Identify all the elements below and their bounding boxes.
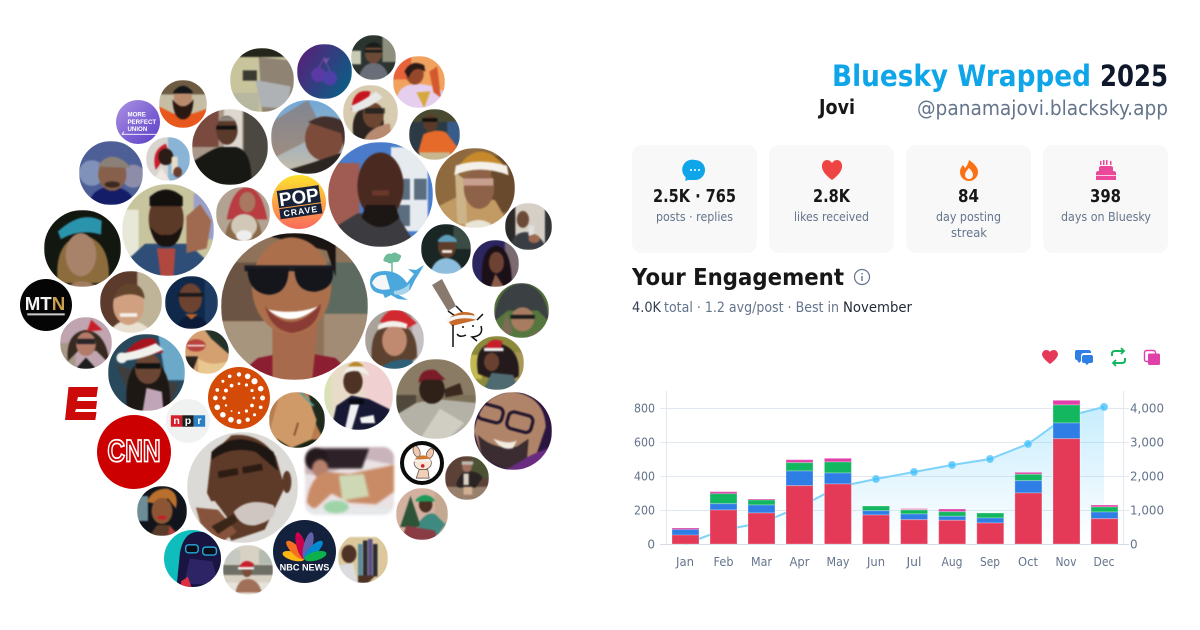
avatar: man with cat (216, 187, 270, 241)
icon: speech bubble (682, 160, 705, 181)
month labels: Oct (1018, 555, 1038, 569)
avatar: older man smiling (100, 271, 162, 333)
right axis labels: 3,000 (1130, 436, 1164, 450)
display name: Jovi (817, 95, 855, 119)
avatar: More Perfect Union logo: PERFECT (127, 119, 156, 126)
avatar: Pop Crave logo (272, 175, 326, 229)
avatar: man in orange shirt (409, 109, 460, 160)
avatar collage (20, 35, 552, 595)
month labels: Jan (675, 555, 694, 569)
avatar: man in kente santa hat (435, 148, 515, 228)
handle: @panamajovi.blacksky.app (917, 96, 1168, 120)
icon: ESPN E logo (65, 387, 98, 420)
chart: monthly engagement (634, 391, 1164, 569)
avatar: woman with curly hair and santa hat (108, 334, 185, 411)
title: Bluesky Wrapped (832, 59, 1091, 93)
avatar: illustrated woman (393, 56, 445, 108)
avatar: NPR logo: r (197, 415, 201, 427)
engagement summary: 4.0K (632, 300, 662, 316)
right axis labels: 2,000 (1130, 470, 1164, 484)
avatar: NPR logo (166, 399, 210, 443)
bar: Dec (1091, 505, 1118, 544)
avatar: MTN logo (20, 279, 72, 331)
icon: info (854, 270, 870, 284)
month labels: Mar (751, 555, 772, 569)
panel: days on Bluesky: days on Bluesky (1061, 210, 1151, 224)
left axis labels: 400 (634, 470, 655, 484)
avatar: man in glasses on navy (165, 276, 218, 329)
avatar: More Perfect Union logo: MORE (127, 112, 146, 119)
avatar: man in hoodie (328, 142, 433, 247)
avatar: woman in teal bandana (44, 210, 121, 287)
avatar: man with phone in mirror (505, 203, 552, 250)
left axis labels: 200 (634, 504, 655, 518)
avatar: bearded man (159, 80, 207, 128)
avatar: woman's lips closeup (185, 330, 229, 374)
title: 2025 (1100, 59, 1168, 93)
avatar: man among trees (271, 100, 345, 174)
avatar: main woman in sunglasses (221, 233, 368, 380)
avatar: woman with long dark hair (472, 240, 519, 287)
month labels: Feb (714, 555, 734, 569)
month labels: Aug (942, 555, 962, 569)
avatar: MTN logo: MTN (25, 293, 65, 314)
left axis labels: 0 (647, 538, 655, 552)
month labels: May (826, 555, 850, 569)
icon: legend replies (1075, 350, 1093, 365)
panel: posts and replies: 2.5K · 765 (653, 186, 736, 207)
panel: likes received (769, 145, 894, 253)
bar: Feb (710, 492, 737, 544)
icon: legend likes (1042, 350, 1058, 364)
panel: likes received: likes received (794, 210, 869, 224)
panel: likes received: 2.8K (813, 186, 851, 207)
right axis labels (1130, 402, 1164, 552)
avatar: man in car (351, 35, 396, 80)
left axis labels (634, 402, 655, 552)
bar: Jul (901, 508, 928, 544)
icon: cake (1096, 160, 1116, 180)
panel: day posting streak: streak (951, 226, 987, 240)
panel: days on Bluesky: 398 (1090, 186, 1121, 207)
avatar: Pop Crave logo: POP (278, 185, 320, 211)
avatar: More Perfect Union logo: UNION (127, 126, 148, 133)
avatar: Pop Crave logo: CRAVE (283, 204, 319, 219)
month labels: Jun (866, 555, 885, 569)
right axis labels: 0 (1130, 538, 1138, 552)
avatar: NBC News logo (272, 520, 336, 582)
icon: meme sketch with kente hat (432, 279, 483, 347)
bar: May (824, 458, 851, 544)
avatar: chest closeup (269, 392, 325, 448)
bar: Sep (977, 513, 1004, 544)
cumulative area (685, 407, 1104, 544)
cumulative points (872, 404, 1108, 482)
month labels: Nov (1056, 555, 1076, 569)
avatar: woman in santa hat with glasses (343, 85, 398, 140)
avatar: NPR logo: p (185, 415, 192, 427)
bar: Nov (1053, 400, 1080, 544)
icon: legend reposts (1112, 348, 1125, 366)
heading: your engagement: Your Engagement (631, 265, 844, 291)
avatar: man in cap (79, 141, 143, 205)
icon: whale (370, 252, 424, 300)
avatar: man in denim jacket (122, 184, 214, 276)
bar: Oct (1015, 472, 1042, 544)
right axis labels: 4,000 (1130, 402, 1164, 416)
icon: legend quotes (1144, 350, 1160, 365)
avatar: selfie with santa hat (146, 137, 190, 181)
panel: days on Bluesky (1043, 145, 1168, 253)
avatar: Bluesky-orange dotted ring logo (208, 367, 270, 429)
avatar: cherries (297, 44, 352, 99)
right axis labels: 1,000 (1130, 504, 1164, 518)
left axis labels: 800 (634, 402, 655, 416)
stacked bars (672, 400, 1118, 544)
panel: posts and replies (632, 145, 757, 253)
avatar: man in red cap lounging (396, 359, 476, 439)
bar: Jan (672, 528, 699, 544)
avatar: smiling bald man with glasses (474, 392, 552, 470)
avatar: woman in cat-ear hat (494, 283, 549, 338)
panel: day posting streak (906, 145, 1031, 253)
avatar: woman with red lips (137, 486, 187, 536)
bar: Aug (939, 509, 966, 544)
avatar: man with cigar (187, 432, 298, 543)
panel: day posting streak: 84 (958, 186, 979, 207)
avatar: man in blue cap in car (421, 224, 471, 274)
avatar: woman with afro and santa hat (470, 336, 524, 390)
bar: Mar (748, 499, 775, 544)
month labels: Sep (980, 555, 1000, 569)
avatar: cartoon rabbit with black ring (400, 441, 444, 485)
legend icons (1042, 348, 1160, 366)
month labels: Jul (905, 555, 922, 569)
panel: day posting streak: day posting (936, 210, 1001, 224)
avatar: man in tuxedo (324, 361, 393, 430)
bar: Apr (786, 460, 813, 544)
avatar: person with books (338, 533, 388, 583)
month labels (675, 555, 1114, 569)
avatar: NBC News logo: NBC NEWS (279, 562, 329, 572)
avatar: building sign (230, 48, 294, 112)
month labels: Apr (790, 555, 810, 569)
engagement summary: November (843, 300, 912, 316)
panel: posts and replies: posts · replies (656, 210, 733, 224)
avatar: More Perfect Union logo (116, 100, 160, 144)
avatar: man in black sweater (192, 109, 268, 185)
avatar: blurred reclining woman (305, 447, 394, 515)
avatar: CNN logo (97, 415, 171, 489)
avatar: man sitting at table (445, 456, 489, 500)
avatar: man in bath with santa hat (223, 545, 273, 595)
bar: Jun (862, 506, 890, 544)
avatar: man in green hat by Christmas tree (396, 488, 448, 540)
engagement summary (632, 300, 912, 316)
month labels: Dec (1094, 555, 1114, 569)
cumulative line (685, 407, 1104, 544)
avatar: Darth Vader in sunglasses (164, 530, 220, 586)
avatar: woman with santa hat and mask (60, 317, 112, 369)
avatar: woman in red santa hat with curls (365, 310, 424, 369)
engagement summary: total · 1.2 avg/post · Best in (664, 300, 839, 316)
icon: heart (822, 160, 842, 180)
icon: flame (960, 160, 978, 181)
left axis labels: 600 (634, 436, 655, 450)
avatar: NPR logo: n (173, 415, 180, 427)
